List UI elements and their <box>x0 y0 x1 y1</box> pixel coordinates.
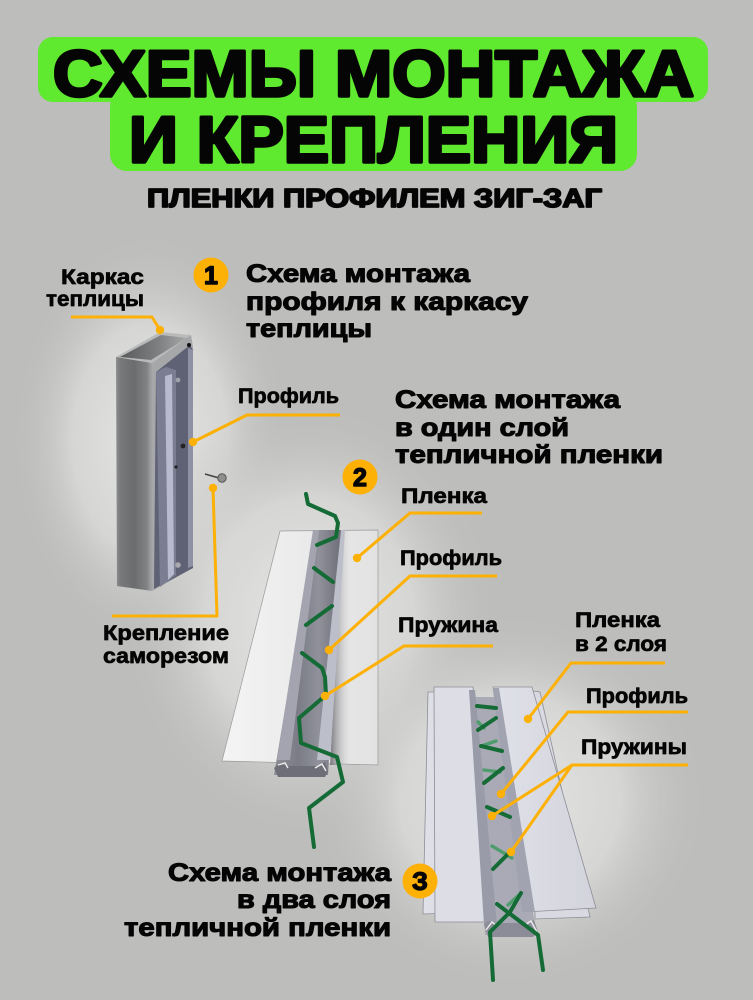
callout: frame <box>46 265 164 334</box>
heading: scheme 1: теплицы <box>246 315 372 343</box>
callout: film: Пленка <box>401 484 488 508</box>
title: И КРЕПЛЕНИЯ <box>129 103 618 176</box>
heading: scheme 2: в один слой <box>395 414 569 442</box>
callout: self-tapping screw <box>103 484 229 668</box>
diagram 2: single-layer film with profile and spring <box>222 494 378 847</box>
heading: scheme 1 <box>246 260 528 343</box>
icon: screw <box>205 474 226 482</box>
badge 2: 2 <box>353 464 367 492</box>
callout: profile 1 <box>189 384 340 446</box>
badge 1 <box>194 258 228 292</box>
heading: scheme 2: Схема монтажа <box>395 386 621 414</box>
callout: self-tapping screw: Крепление <box>103 621 229 645</box>
heading: scheme 3: Схема монтажа <box>168 859 392 887</box>
badge 2 <box>342 460 378 494</box>
callout: two-layer film <box>524 608 667 723</box>
callout: self-tapping screw: саморезом <box>103 644 229 668</box>
callout: profile 3: Профиль <box>586 684 688 708</box>
callout: profile 1: Профиль <box>238 384 339 408</box>
title <box>38 37 708 176</box>
heading: scheme 3 <box>124 859 392 942</box>
callout: springs: Пружины <box>581 735 687 759</box>
callout: film <box>353 484 488 562</box>
heading: scheme 2 <box>395 386 663 469</box>
callout: two-layer film: Пленка <box>575 608 661 632</box>
callout: profile 3 <box>497 684 688 798</box>
callout: spring <box>321 613 499 700</box>
diagram 3: double-layer film with profile and springs <box>423 687 596 980</box>
callout: two-layer film: в 2 слоя <box>575 632 667 656</box>
heading: scheme 2: тепличной пленки <box>395 441 663 469</box>
callout: spring: Пружина <box>398 613 499 637</box>
badge 3: З <box>412 868 428 896</box>
heading: scheme 1: профиля к каркасу <box>246 288 528 316</box>
callout: springs <box>488 735 688 856</box>
callout: frame: теплицы <box>46 287 144 311</box>
diagram 1: frame column with profile <box>116 332 193 591</box>
heading: scheme 3: в два слоя <box>237 886 391 914</box>
title: СХЕМЫ МОНТАЖА <box>53 37 694 110</box>
callout: frame: Каркас <box>61 265 144 289</box>
subtitle: ПЛЕНКИ ПРОФИЛЕМ ЗИГ-ЗАГ <box>147 183 602 213</box>
badge 3 <box>402 864 438 898</box>
heading: scheme 1: Схема монтажа <box>246 260 471 288</box>
heading: scheme 3: тепличной пленки <box>124 914 391 942</box>
badge 1: 1 <box>204 262 218 290</box>
callout: profile 2 <box>325 546 502 654</box>
callout: profile 2: Профиль <box>400 546 502 570</box>
